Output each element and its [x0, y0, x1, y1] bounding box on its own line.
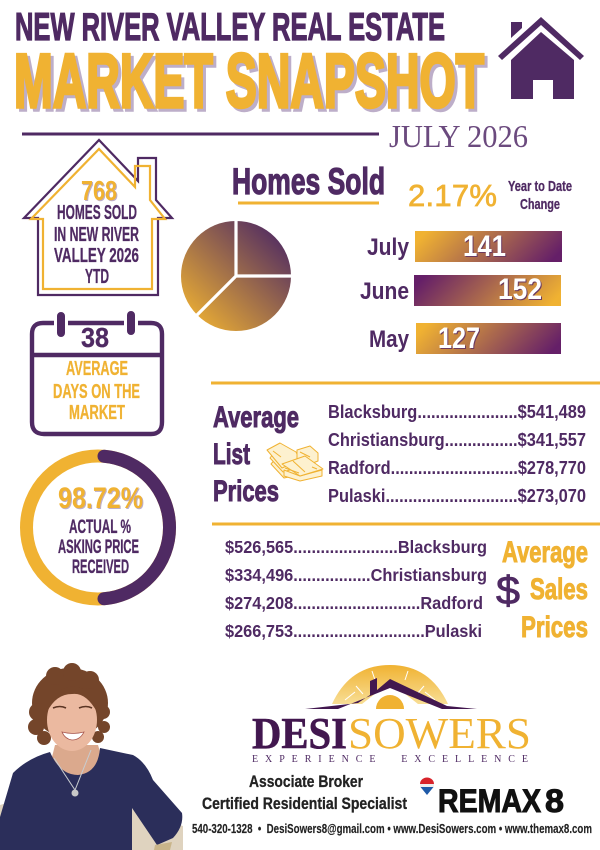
logo sun	[332, 665, 448, 704]
credentials: Certified Residential Specialist	[202, 794, 407, 813]
icon: cash stacks	[267, 443, 323, 481]
label: actual % asking price received: RECEIVED	[72, 557, 129, 578]
logo wordmark: 8	[545, 783, 564, 819]
label: homes sold text: IN NEW RIVER	[54, 223, 139, 246]
heading: Homes Sold: Homes Sold	[232, 161, 385, 202]
divider rule	[211, 382, 600, 384]
chart: pie	[181, 218, 294, 331]
stat: 768: 768	[81, 175, 117, 206]
icon: house outline	[24, 140, 172, 295]
bar: June	[360, 273, 561, 306]
list: average sales prices by town: $266,753.............................Pulaski	[225, 621, 482, 641]
label: average days on the market: DAYS ON THE	[53, 380, 140, 403]
logo window	[376, 695, 404, 709]
label: average days on the market: AVERAGE	[66, 357, 128, 380]
bar: June: 152	[498, 273, 542, 306]
list: average sales prices by town: $526,565.......................Blacksburg	[225, 537, 487, 557]
stat: 38: 38	[81, 322, 109, 353]
icon: balloon	[420, 778, 434, 795]
label: actual % asking price received: ASKING PRICE	[58, 537, 139, 558]
panel: homes sold YTD house	[24, 140, 172, 295]
icon: dollar sign: $	[496, 569, 520, 613]
heading underline	[238, 202, 379, 204]
label: average days on the market	[53, 357, 140, 424]
list: average list prices by town	[328, 402, 586, 506]
divider rule	[212, 522, 600, 526]
icon: calendar	[32, 315, 162, 434]
credentials	[202, 772, 407, 813]
list: average sales prices by town: $334,496.................Christiansburg	[225, 565, 487, 585]
logo: Desi Sowers	[252, 665, 531, 765]
heading: Average List Prices	[213, 401, 299, 508]
label: year to date change	[508, 178, 572, 213]
bar: May: 127	[438, 322, 480, 355]
heading: Average List Prices: Prices	[213, 475, 279, 508]
bar: July: 141	[463, 230, 506, 263]
credentials: Associate Broker	[249, 772, 363, 791]
label: actual % asking price received: ACTUAL %	[69, 517, 131, 538]
logo wordmark: SOWERS	[348, 709, 531, 758]
chart: donut	[26, 456, 170, 599]
label: homes sold text	[54, 201, 139, 288]
list: average sales prices by town: $274,208............................Radford	[225, 593, 483, 613]
heading: Average List Prices: Average	[213, 401, 299, 434]
list: average sales prices by town	[225, 537, 487, 641]
label: actual % asking price received	[58, 517, 139, 578]
stat: 2.17%: 2.17%	[408, 178, 497, 213]
bar: July	[367, 230, 562, 263]
logo wordmark: REMAX	[438, 783, 542, 819]
logo sun rays	[345, 671, 435, 700]
logo: RE/MAX 8	[420, 778, 564, 819]
portrait: agent photo	[0, 663, 183, 850]
date: July 2026: JULY 2026	[389, 118, 528, 154]
logo roof	[305, 678, 477, 709]
heading: Average Sales Prices	[502, 536, 588, 644]
logo wordmark: DESI	[252, 709, 347, 758]
panel: days on market calendar	[32, 315, 162, 434]
stat: 98.72%: 98.72%	[58, 482, 143, 515]
label: average days on the market: MARKET	[69, 401, 125, 424]
logo tagline: EXPERIENCE EXCELLENCE	[252, 754, 528, 765]
label: homes sold text: YTD	[85, 265, 109, 288]
bar: May	[369, 322, 561, 355]
label: year to date change: Year to Date	[508, 178, 572, 195]
bar chart: monthly homes sold	[360, 230, 562, 355]
bar: July: July	[367, 234, 410, 261]
label: homes sold text: HOMES SOLD	[57, 201, 137, 224]
bar: June: June	[360, 278, 409, 305]
heading: Average List Prices: List	[213, 438, 250, 471]
label: homes sold text: VALLEY 2026	[54, 244, 139, 267]
divider rule	[22, 132, 379, 136]
icon: house	[498, 17, 584, 99]
label: year to date change: Change	[520, 196, 560, 213]
panel: asking price donut	[26, 456, 170, 599]
bar: May: May	[369, 326, 410, 353]
